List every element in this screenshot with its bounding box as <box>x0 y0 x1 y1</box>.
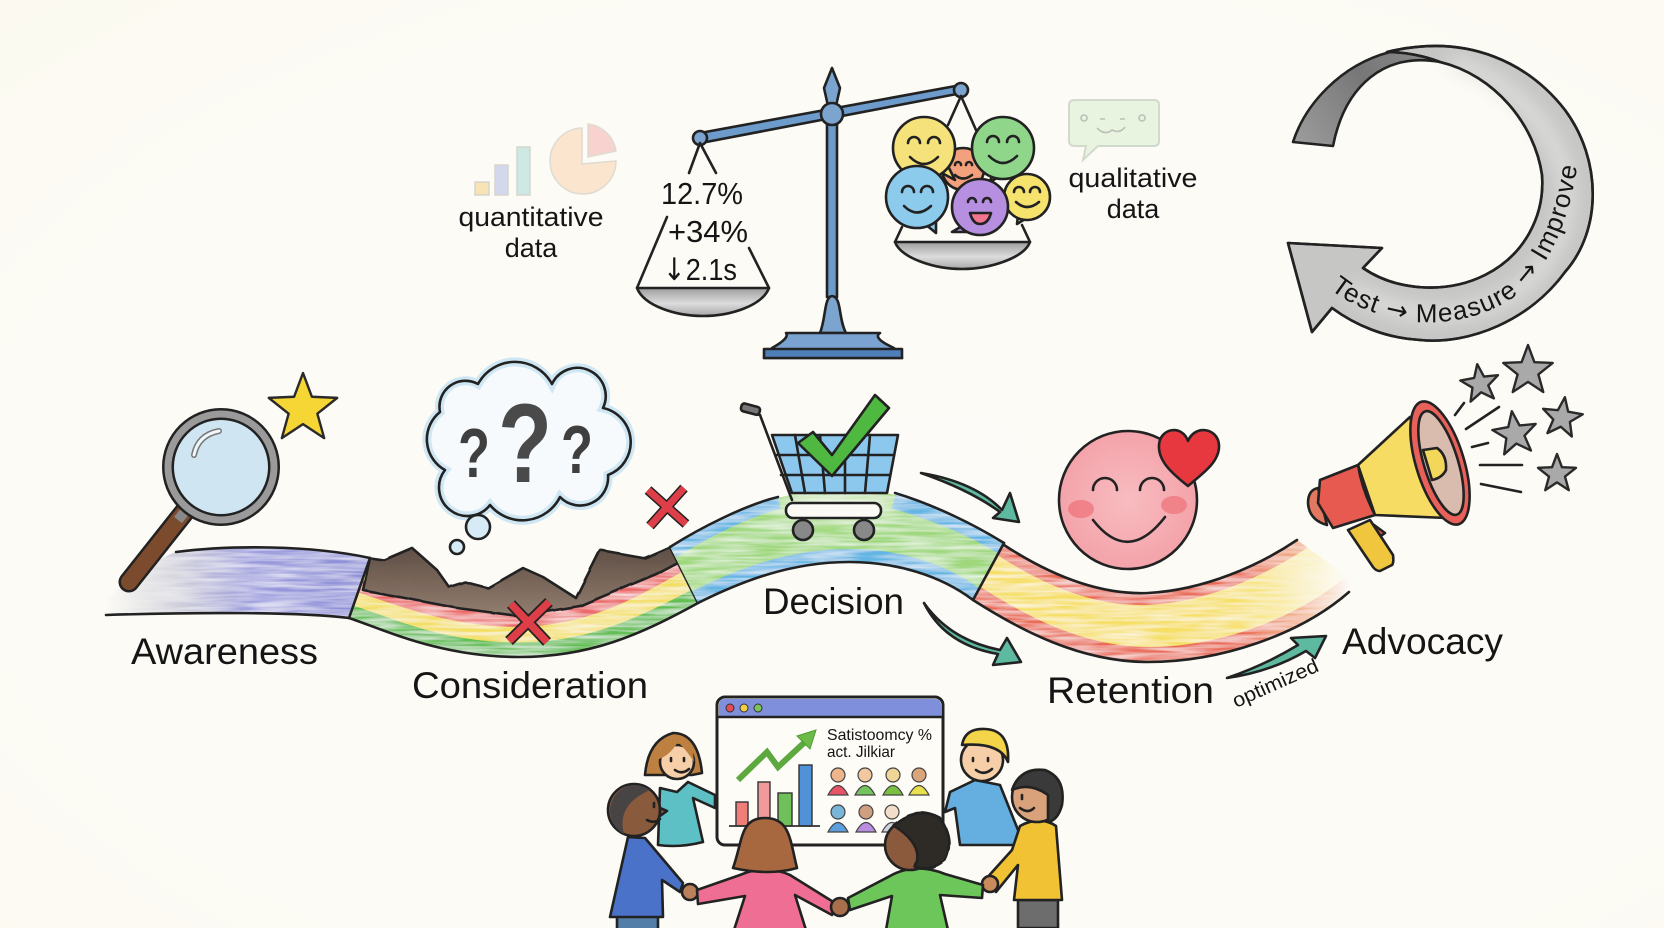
panel: consideration stage <box>349 362 698 706</box>
icon: gray rating stars <box>1458 345 1585 490</box>
person: man with blue shirt <box>608 784 698 928</box>
road divider <box>349 547 698 618</box>
icon: red x above road <box>648 488 686 526</box>
icon: red x on road <box>509 602 549 642</box>
loop highlight <box>1350 62 1567 314</box>
label: decision: Decision <box>763 581 904 622</box>
bar chart <box>729 765 820 826</box>
icon: magnifying glass <box>129 414 274 582</box>
label: quantitative data: data <box>505 233 558 263</box>
icon: blue bubble <box>886 166 948 233</box>
rocky obstacles <box>363 547 678 616</box>
icon: faded pie chart <box>550 124 616 194</box>
metric values: +34% <box>668 214 748 249</box>
loop arrow body <box>1288 46 1593 341</box>
road segment: consideration <box>348 564 700 658</box>
panel: improvement loop arrow <box>1286 44 1594 342</box>
arrow: decision to retention upper <box>921 473 1019 522</box>
label: advocacy: Advocacy <box>1342 621 1503 662</box>
loop arrow tail, dark <box>1293 50 1440 146</box>
rising trend arrow <box>738 730 816 780</box>
arrow: decision to retention lower <box>924 603 1021 665</box>
sound lines <box>1455 403 1522 492</box>
icon: megaphone <box>1308 395 1482 571</box>
panel: advocacy stage <box>1308 345 1585 662</box>
label: retention: Retention <box>1047 670 1214 711</box>
icon: smiling face with heart <box>1059 430 1219 569</box>
scale beam <box>693 83 968 145</box>
panel: qualitative data <box>1068 100 1198 224</box>
label: qualitative data <box>1068 163 1198 224</box>
left pan with metrics <box>637 143 769 316</box>
icon: yellow bubble <box>893 117 955 180</box>
icon: thought cloud <box>427 362 631 554</box>
icon: yellow star <box>269 373 337 438</box>
panel: awareness stage <box>106 373 370 672</box>
question marks: ? <box>458 414 490 492</box>
question marks <box>458 381 593 506</box>
panel: balance scale <box>637 68 1050 358</box>
road segment: retention <box>973 535 1360 662</box>
metric values <box>661 176 748 288</box>
screen caption: act. Jilkiar <box>827 744 896 761</box>
small user icons <box>828 768 929 832</box>
screen caption: Satistoomcy % <box>827 727 932 744</box>
label: qualitative data: data <box>1107 194 1160 224</box>
label: quantitative data: quantitative <box>458 202 604 232</box>
label: quantitative data <box>458 202 604 263</box>
arrow: optimized <box>1227 636 1326 678</box>
icon: orange bubble <box>942 148 984 190</box>
icon: small yellow bubble <box>1004 174 1050 224</box>
person: woman with pink shirt from behind <box>697 818 835 928</box>
person: person with green shirt from behind <box>831 813 983 928</box>
icon: green bubble <box>972 117 1034 182</box>
panel: retention stage <box>973 430 1360 713</box>
metric values: ↓2.1s <box>663 252 737 288</box>
label: qualitative data: qualitative <box>1068 163 1198 193</box>
label: optimized: optimized <box>1229 655 1322 713</box>
icon: purple bubble <box>952 179 1008 235</box>
screen caption <box>827 727 932 761</box>
person: man with yellow shirt <box>982 770 1063 928</box>
panel: team around dashboard <box>608 697 1063 928</box>
loop outline <box>1288 46 1593 341</box>
label: consideration: Consideration <box>412 665 648 706</box>
right pan with speech bubbles <box>886 96 1050 269</box>
question marks: ? <box>561 412 593 488</box>
label: awareness: Awareness <box>131 631 318 672</box>
scale post and base <box>764 68 902 358</box>
question marks: ? <box>498 381 552 506</box>
person: teal shirt behind screen <box>645 733 715 846</box>
person: blue shirt behind screen <box>945 729 1020 845</box>
label: test measure improve: Test → Measure → Improve <box>1335 166 1576 322</box>
road segment: decision <box>670 488 1004 603</box>
icon: faded bar chart <box>475 147 530 195</box>
icon: faded speech bubble <box>1069 100 1159 160</box>
dashboard screen <box>717 697 943 845</box>
metric values: 12.7% <box>661 176 743 211</box>
icon: heart <box>1159 430 1219 486</box>
icon: shopping cart <box>740 395 898 540</box>
icon: green checkmark <box>798 395 889 476</box>
road segment: awareness <box>106 547 370 618</box>
panel: decision stage <box>670 395 1021 665</box>
panel: quantitative data <box>458 124 616 263</box>
